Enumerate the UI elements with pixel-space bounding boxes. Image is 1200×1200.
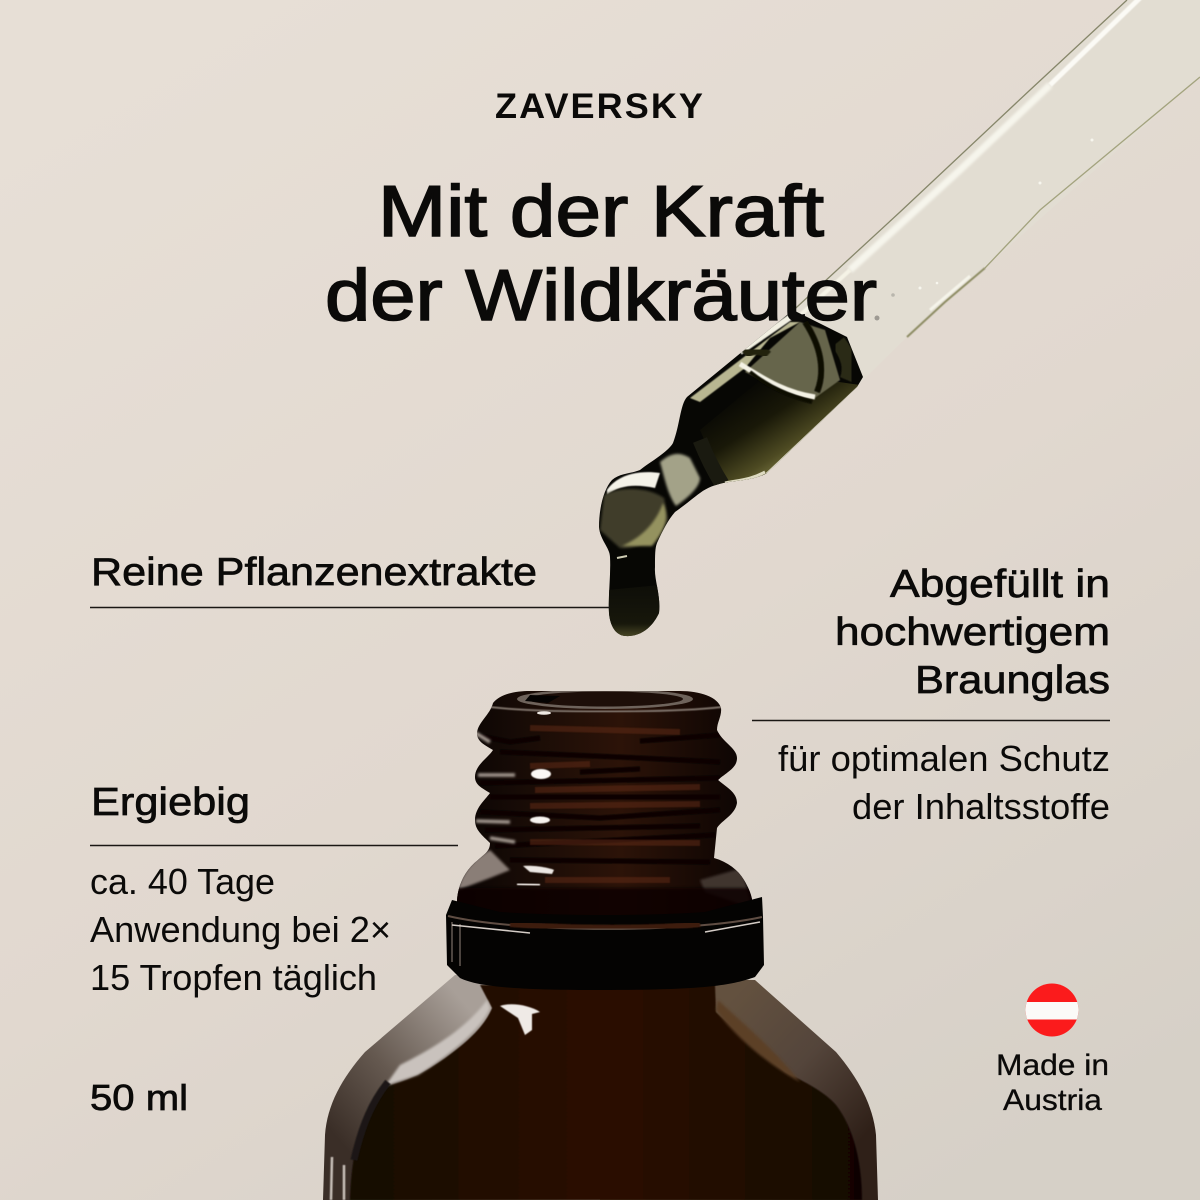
callout: economical: Ergiebig [91,781,250,824]
callout: amber glass [752,563,1110,827]
callout: economical: ca. 40 Tage [90,861,275,902]
volume: 50 ml [90,1077,188,1118]
callout: amber glass: Abgefüllt in [890,563,1110,606]
bottle body [320,970,880,1200]
bottle [320,685,880,1200]
callout: amber glass: hochwertigem [835,611,1110,654]
title: Mit der Kraft [378,172,824,252]
callout: amber glass: der Inhaltsstoffe [852,786,1110,827]
callout: pure plant extracts: Reine Pflanzenextrakte [91,551,537,594]
made in austria: Austria [1003,1084,1102,1117]
callout: economical [90,781,458,998]
callout: amber glass: Braunglas [915,659,1110,702]
title: der Wildkräuter [325,256,877,336]
logo: ZAVERSKY [495,87,705,126]
bottle neck [457,691,752,915]
title [325,172,877,336]
dropper oil and drop [599,310,863,640]
made in austria: Made in [996,1049,1109,1082]
pipette glass tube [785,0,1200,385]
icon: austria flag [1025,983,1079,1037]
callout: economical: 15 Tropfen täglich [90,957,377,998]
made in austria [996,1049,1109,1117]
callout: economical: Anwendung bei 2× [90,909,391,950]
callout: amber glass: für optimalen Schutz [778,738,1110,779]
bottle collar ring [446,897,764,990]
